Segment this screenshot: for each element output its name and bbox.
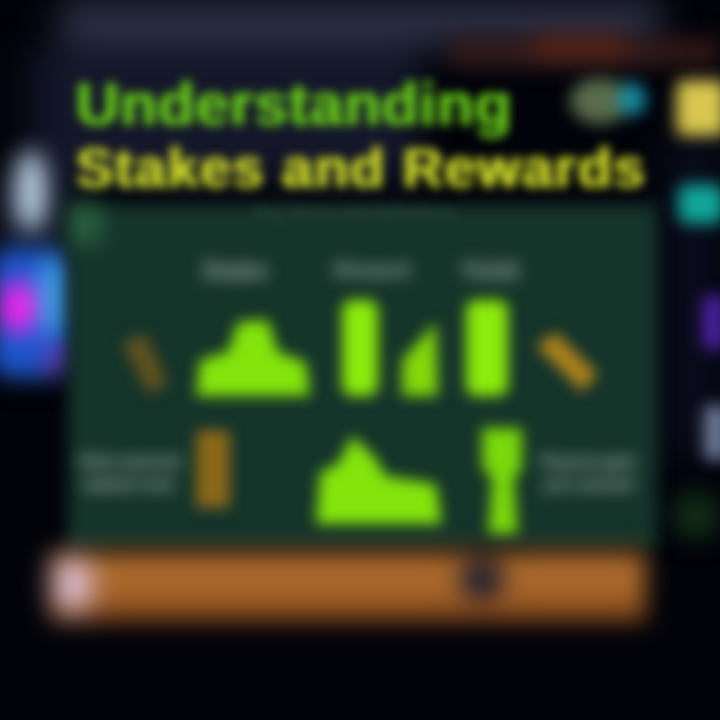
mark: olive slash left [122, 334, 168, 394]
bar: top tall bar one [342, 300, 378, 396]
area chart: left hill [196, 320, 310, 396]
text block: lower right: you earned [543, 475, 633, 494]
plant glow lower right [672, 490, 720, 540]
mark: orange slash right [536, 332, 598, 392]
icon: teal tile [678, 184, 720, 224]
area chart: bottom hill [316, 436, 442, 524]
text block: lower right: Payout gain [540, 452, 636, 471]
column label 3: Yield [460, 257, 519, 285]
bar: top tall bar two [466, 300, 508, 396]
text block: lower right [534, 448, 642, 500]
text block: lower left [73, 447, 188, 500]
title line 1: Understanding [76, 71, 512, 138]
mark: orange column [196, 430, 230, 508]
right side decorations [561, 67, 720, 471]
title line 2: Stakes and Rewards [76, 136, 646, 199]
column label 2: Reward [334, 259, 410, 282]
icon: neon blue and magenta glow [0, 250, 72, 376]
text block: lower left: Risk amount [80, 452, 182, 471]
icon: cyan dot [618, 82, 646, 116]
icon: pale round ledge end [54, 558, 92, 612]
bar: top short bar [402, 322, 438, 396]
panel: wooden ledge [50, 552, 646, 622]
icon: pale tile [704, 405, 720, 460]
panel: green chalkboard [68, 204, 658, 548]
shelf: dark red top right [450, 40, 720, 64]
board header text: Key Terms and Definitions [255, 205, 456, 222]
icon: olive and teal blob [570, 78, 630, 124]
column label 1: Stake [202, 257, 268, 285]
icon: yellow tile [676, 80, 720, 136]
bar: bottom column [482, 428, 522, 534]
text block: lower left: staked now [82, 475, 174, 494]
icon: pale water drop [15, 150, 47, 230]
green corner highlight [68, 204, 102, 244]
icon: dark round badge [460, 560, 504, 598]
icon: violet bar [702, 295, 720, 350]
